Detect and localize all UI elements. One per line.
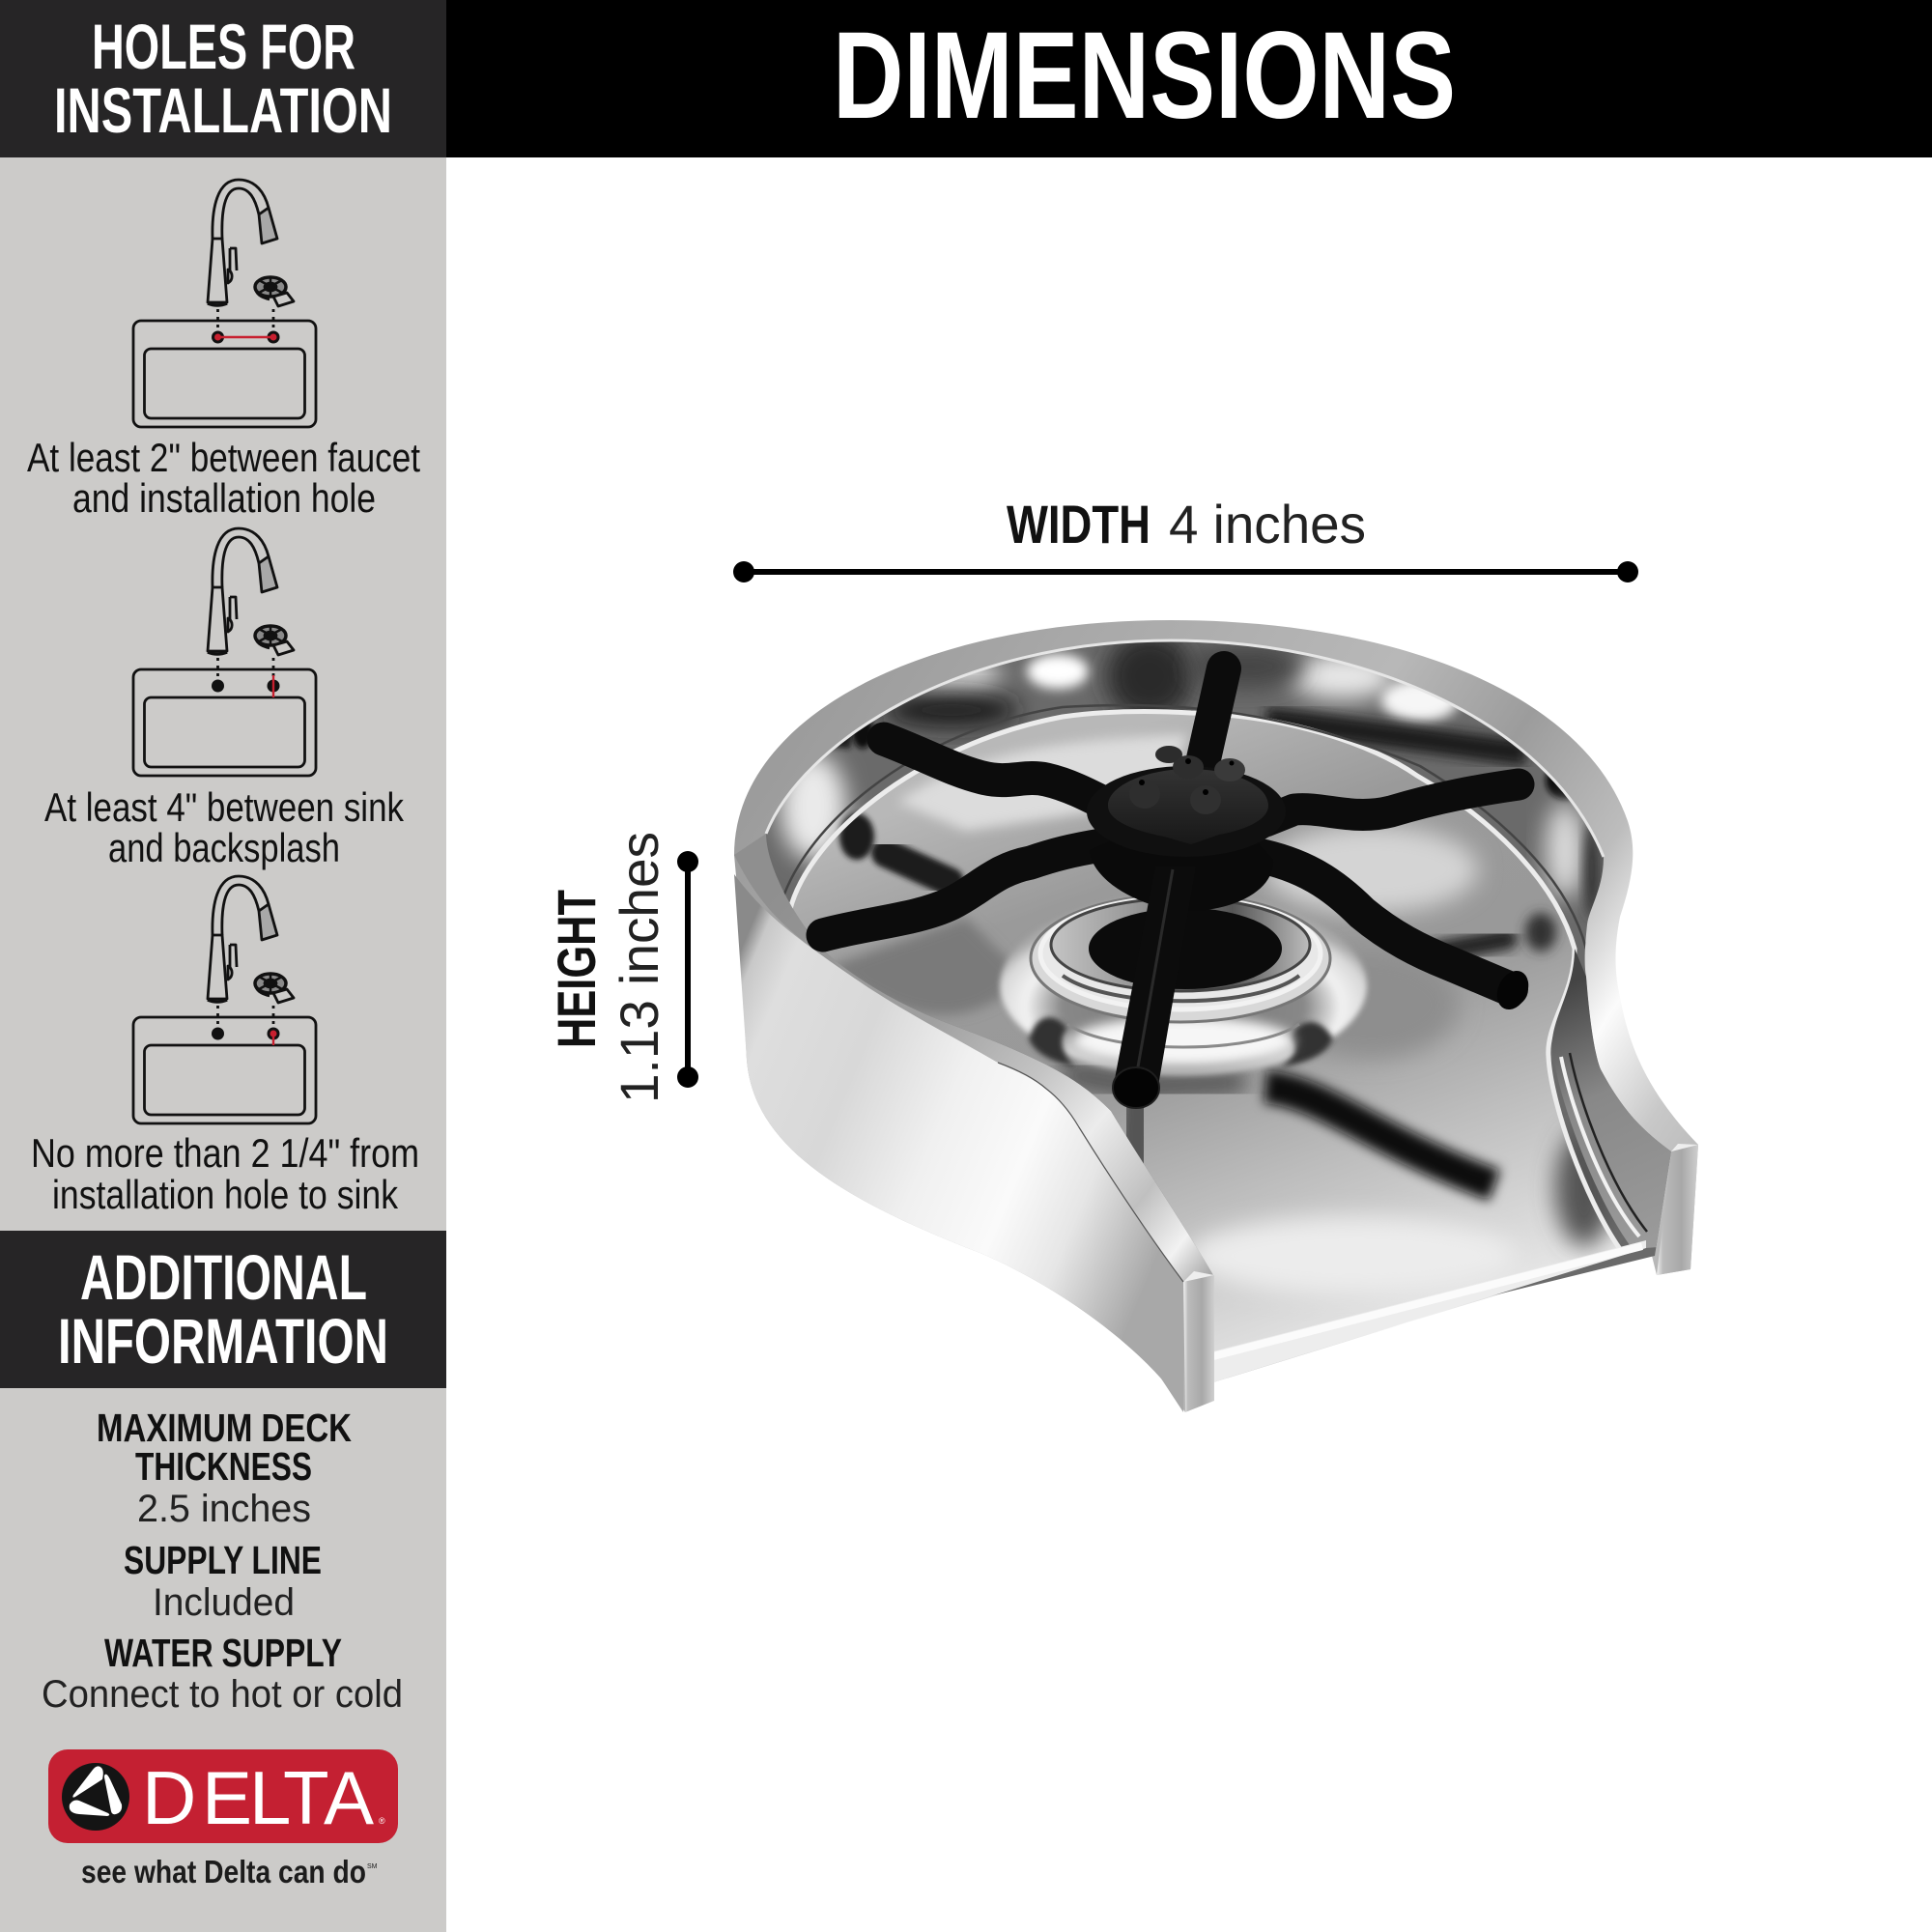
width dimension [733, 494, 1638, 582]
icon: faucet and sink, 2 1/4 inch to sink [133, 876, 316, 1123]
spec: maximum deck thickness [97, 1406, 352, 1530]
spec: water supply: WATER SUPPLY [104, 1631, 342, 1675]
heading: holes for installation [0, 0, 446, 157]
spec: water supply: Connect to hot or cold [42, 1673, 403, 1716]
front fins [1183, 1144, 1698, 1412]
text: distance to sink [31, 1130, 419, 1217]
heading: additional information: ADDITIONAL [80, 1241, 367, 1313]
text: faucet spacing [27, 435, 420, 521]
text: faucet spacing: At least 2" between faucet [27, 435, 420, 480]
spec: maximum deck thickness: THICKNESS [135, 1444, 312, 1489]
heading: holes for installation: INSTALLATION [54, 74, 392, 146]
top header bar [446, 0, 1932, 157]
ledge highlights [788, 712, 1620, 1249]
title: dimensions: DIMENSIONS [833, 7, 1456, 145]
tagline: SM [367, 1863, 378, 1870]
spec: supply line: Included [153, 1581, 295, 1624]
central dome [1000, 895, 1367, 1075]
icon: faucet and sink, 2 inch spacing [133, 180, 316, 427]
black spray arms [823, 668, 1519, 989]
text: backsplash spacing: At least 4" between sink [44, 784, 405, 830]
tagline: see what Delta can do [81, 1854, 366, 1889]
spray hub with nozzles [1087, 746, 1286, 911]
spec: maximum deck thickness: MAXIMUM DECK [97, 1406, 352, 1450]
width dimension: WIDTH [1007, 494, 1151, 554]
rim and body silhouette [734, 620, 1698, 1412]
band edge line [998, 1063, 1183, 1282]
text: distance to sink: No more than 2 1/4" from [31, 1130, 419, 1176]
text: faucet spacing: and installation hole [72, 475, 376, 521]
height dimension: 1.13 inches [609, 832, 669, 1103]
heading: additional information: INFORMATION [58, 1305, 388, 1377]
lip highlight [1213, 1246, 1642, 1356]
arm end: right lower [1492, 966, 1534, 1014]
spec: supply line [124, 1538, 322, 1624]
height dimension [546, 832, 698, 1103]
text: backsplash spacing: and backsplash [108, 825, 340, 870]
heading: holes for installation: HOLES FOR [92, 11, 355, 82]
floor shading and reflections [831, 734, 1613, 1294]
centre spray arm [1113, 867, 1196, 1108]
heading: additional information [0, 1231, 446, 1388]
upper wall reflections [781, 633, 1600, 918]
height dimension: HEIGHT [546, 890, 607, 1048]
bowl floor [788, 712, 1620, 1364]
icon: faucet and sink, 4 inch to backsplash [133, 528, 316, 776]
logo: delta: DELTA [142, 1755, 374, 1840]
rim inner edge lines [766, 640, 1604, 857]
logo: delta: ® [379, 1816, 385, 1826]
text: distance to sink: installation hole to sink [52, 1172, 399, 1217]
outer wall [734, 874, 1183, 1412]
spec: water supply [42, 1631, 403, 1716]
text: backsplash spacing [44, 784, 405, 870]
spec: supply line: SUPPLY LINE [124, 1538, 322, 1582]
logo: delta [48, 1749, 398, 1843]
front lip [1213, 1240, 1646, 1382]
product: glass rinser [734, 620, 1700, 1412]
right inner wall [1552, 949, 1671, 1249]
left sidebar background [0, 0, 446, 1932]
spec: maximum deck thickness: 2.5 inches [137, 1488, 311, 1530]
bowl interior [766, 641, 1671, 1351]
chrome front band [734, 834, 1214, 1282]
width dimension: 4 inches [1169, 494, 1366, 554]
